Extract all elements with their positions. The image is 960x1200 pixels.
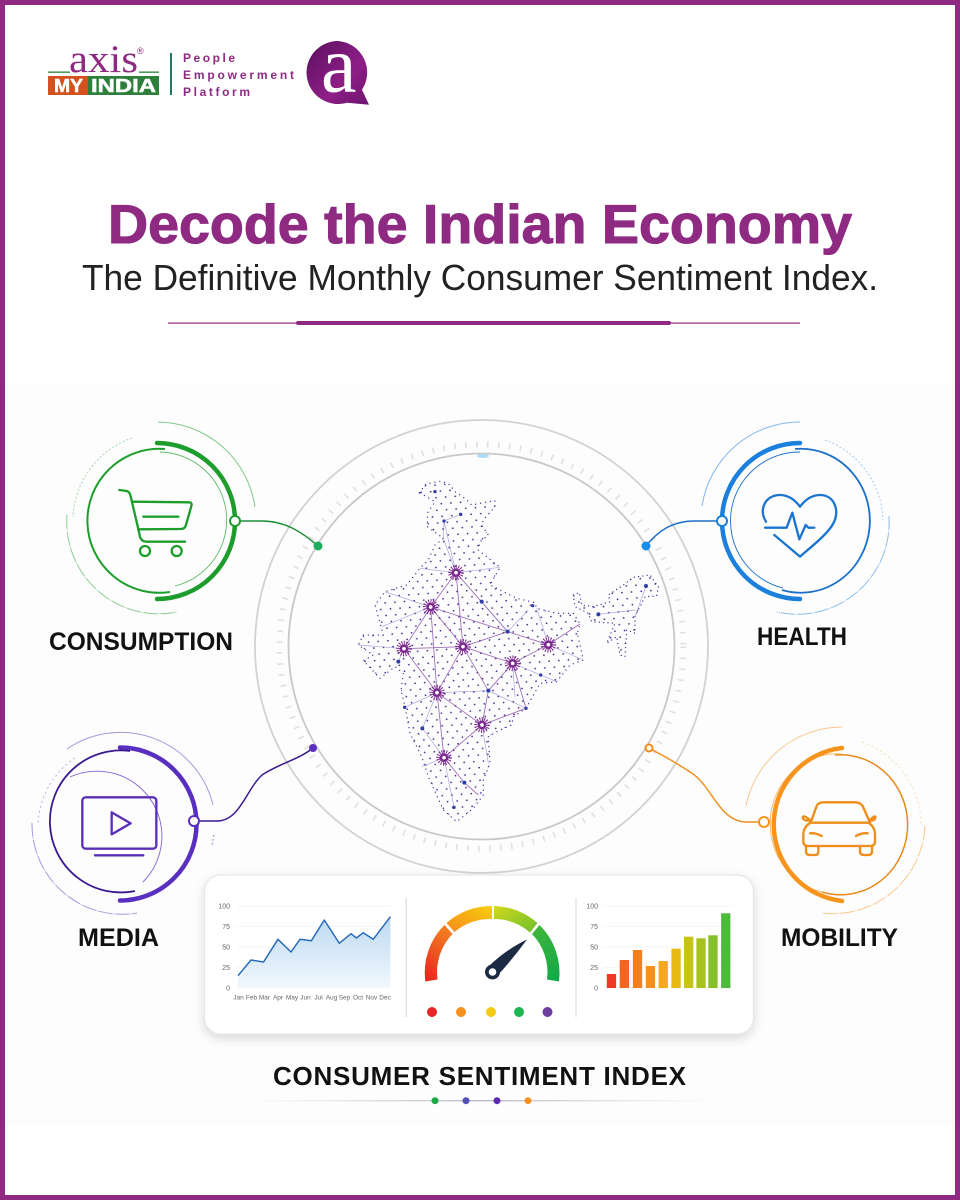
media rings: [32, 732, 214, 914]
speech bubble a logo: a: [321, 22, 357, 110]
speech bubble a logo: [307, 22, 369, 110]
registered mark: ®: [137, 46, 144, 56]
line chart axis values: 0: [226, 986, 230, 992]
secondary links: [358, 514, 646, 807]
mainland dot field: [353, 477, 587, 827]
line chart months: Apr: [273, 994, 284, 1002]
bar chart axis values: 75: [590, 924, 598, 931]
panel: dashboard card: [204, 875, 754, 1034]
gauge red segment: [425, 925, 452, 982]
card divider right: [576, 898, 577, 1017]
hub nodes: [399, 567, 554, 763]
tagline: People: [183, 51, 235, 65]
line chart axis values: 50: [222, 944, 230, 952]
gauge green segment: [532, 925, 560, 982]
icon: video screen: [82, 797, 156, 855]
central dial rings: [255, 420, 708, 873]
health connector: [646, 521, 722, 546]
line chart months: Aug: [326, 994, 338, 1002]
card divider left: [406, 898, 407, 1017]
media connector: [194, 748, 313, 821]
index heading: CONSUMER SENTIMENT INDEX: [273, 1061, 687, 1091]
mobility connector: [649, 748, 764, 822]
india network map: [353, 477, 663, 827]
logo text: india: INDIA: [91, 76, 156, 96]
line chart months: Sep: [339, 994, 351, 1002]
icon: heart with pulse: [763, 495, 836, 557]
logo text: my: MY: [54, 76, 83, 96]
logo: axis my india: [48, 22, 369, 110]
line chart area: [238, 917, 390, 988]
line chart axis values: 25: [222, 965, 230, 972]
northeast outline: [573, 575, 658, 657]
line chart months: Jan: [233, 994, 244, 1002]
line chart axis values: [218, 904, 230, 992]
line chart months: Nov: [366, 994, 378, 1002]
line chart months: Jun: [300, 994, 311, 1002]
bar chart axis values: 100: [586, 904, 598, 910]
subtitle: The Definitive Monthly Consumer Sentiment Index.: [82, 257, 878, 298]
heading rule: [168, 321, 800, 325]
northeast dot field: [574, 577, 656, 651]
bar chart axis values: 25: [590, 965, 598, 972]
tagline: Empowerment: [183, 68, 294, 82]
consumption label: CONSUMPTION: [49, 628, 233, 656]
media label: MEDIA: [78, 924, 159, 952]
bars: [607, 913, 730, 988]
tagline: Platform: [183, 85, 250, 99]
minor nodes: [396, 490, 648, 809]
panel: media: [32, 732, 317, 952]
line chart months: Mar: [259, 994, 271, 1002]
gauge lime segment: [494, 906, 538, 932]
logo band: india: [88, 76, 159, 95]
mobility label: MOBILITY: [781, 924, 898, 952]
gauge needle: [487, 940, 527, 976]
gauge amber segment: [446, 906, 492, 932]
line chart months: Oct: [353, 994, 363, 1002]
bar chart: [586, 904, 733, 992]
mainland outline: [358, 481, 583, 822]
panel: consumption: [49, 422, 322, 656]
icon: shopping cart: [119, 490, 192, 556]
bar chart axis values: 0: [594, 986, 598, 992]
line chart months: May: [286, 994, 299, 1002]
network links: [404, 573, 580, 795]
line chart months: Dec: [379, 994, 392, 1002]
line chart months: Jul: [314, 994, 323, 1002]
soft background band: [5, 385, 955, 1125]
gauge legend dots: [427, 1007, 552, 1017]
bar chart axis values: 50: [590, 944, 598, 952]
tagline: [183, 51, 294, 99]
icon: car: [803, 802, 875, 855]
panel: mobility: [646, 727, 925, 952]
line chart: [218, 904, 392, 1002]
card background: [204, 875, 754, 1034]
line chart axis values: 100: [218, 904, 230, 910]
health label: HEALTH: [757, 623, 847, 651]
panel: health: [642, 422, 889, 651]
line chart months: [233, 994, 392, 1002]
line chart trend: [238, 917, 390, 976]
gauge: [425, 906, 560, 1017]
mobility rings: [746, 727, 925, 914]
logo wordmark: axis: axis: [69, 38, 138, 81]
index rule with dots: [248, 1097, 718, 1104]
consumption rings: [67, 422, 255, 614]
health rings: [702, 422, 889, 614]
logo divider: [170, 53, 172, 95]
line chart axis values: 75: [222, 924, 230, 931]
consumption connector: [235, 521, 318, 546]
line chart months: Feb: [246, 994, 257, 1002]
logo band: my: [48, 76, 88, 95]
bar chart axis values: [586, 904, 598, 992]
title: Decode the Indian Economy: [108, 193, 852, 255]
